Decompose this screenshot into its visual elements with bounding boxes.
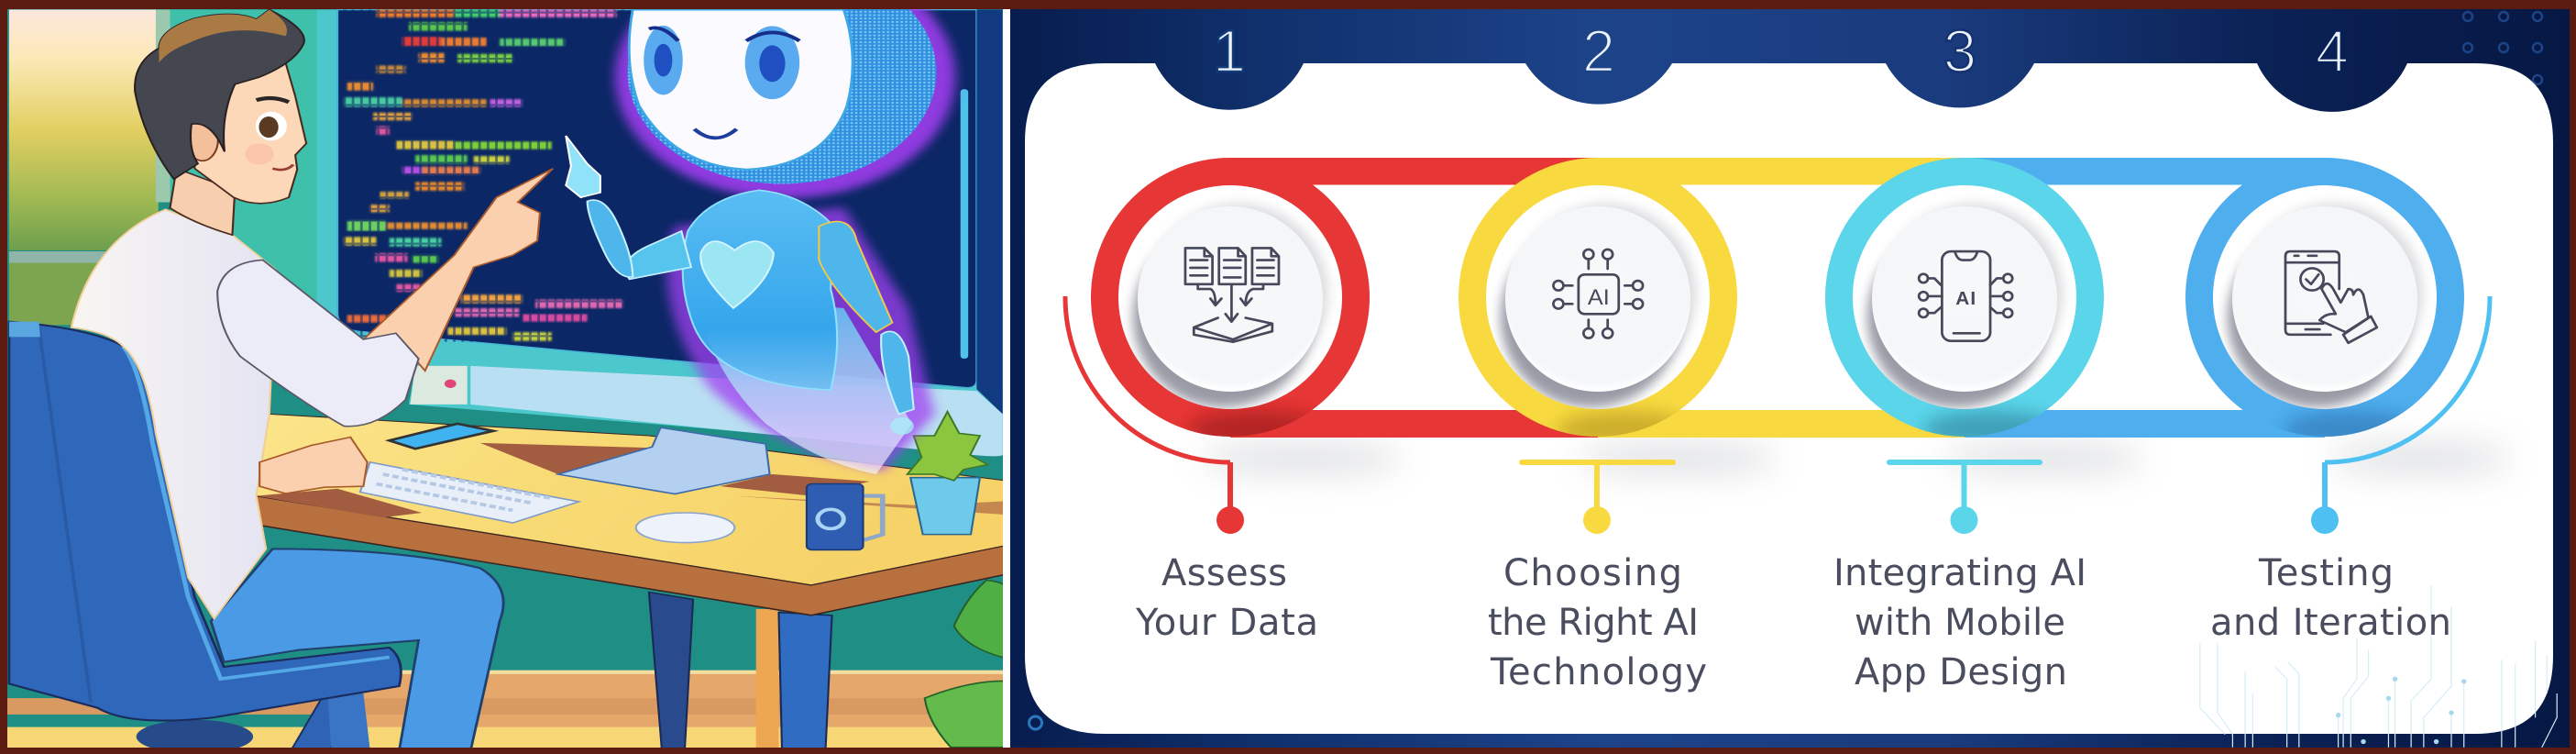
label: Assess Your Data: Your Data (1135, 602, 1318, 644)
decorative dots top right (2463, 12, 2542, 84)
robot tail (710, 307, 911, 474)
step numbers: 1 (1213, 17, 1246, 84)
label: Assess Your Data (1135, 552, 1318, 644)
hood and head (628, 0, 936, 184)
label: Integrating AI with Mobile App Design: App Design (1855, 651, 2067, 693)
circuit decoration (2200, 585, 2557, 748)
icon: AI phone (1919, 251, 2012, 341)
connecting bands (1230, 158, 2325, 438)
hand on desk (259, 438, 368, 493)
leaves (925, 581, 1012, 748)
step numbers: 3 (1943, 17, 1976, 84)
label: Testing and Iteration: Testing (2258, 552, 2394, 594)
right panel: navy background (1010, 9, 2570, 748)
purple glow (615, 0, 955, 198)
code on screen (341, 9, 626, 342)
illustration: developer and AI robot at a desk (0, 0, 1039, 754)
phone on desk (390, 424, 493, 449)
label: Testing and Iteration: and Iteration (2210, 602, 2451, 644)
step 4 ring (2185, 158, 2464, 448)
robot (566, 0, 955, 474)
heart (700, 241, 774, 308)
desk top (257, 414, 1012, 615)
mouse (636, 513, 734, 543)
connector: step 3 (1889, 462, 2040, 534)
label: Integrating AI with Mobile App Design: Integrating AI (1833, 552, 2086, 594)
face (194, 62, 306, 204)
white card with number notches (1025, 63, 2553, 734)
neck (170, 169, 235, 235)
step numbers: 2 (1582, 17, 1615, 84)
step 2 ring (1459, 158, 1737, 448)
connector: step 4 (2311, 296, 2490, 534)
hair (135, 9, 304, 179)
desk legs (649, 593, 832, 751)
robot body (683, 190, 837, 390)
step 1 ring (1091, 158, 1370, 448)
icon: AI chip: AI (1588, 285, 1610, 310)
monitor stand (558, 427, 770, 494)
step numbers (1213, 17, 2349, 84)
label: Choosing the Right AI Technology: Technology (1490, 651, 1707, 693)
keyboard (360, 462, 578, 523)
label: Assess Your Data: Assess (1161, 552, 1287, 594)
white gap between panels (1003, 9, 1010, 748)
label: Integrating AI with Mobile App Design: with Mobile (1855, 602, 2065, 644)
icon: AI chip (1553, 249, 1643, 338)
label: Testing and Iteration (2210, 552, 2451, 644)
person (72, 9, 553, 751)
monitor (316, 9, 1039, 458)
label: Integrating AI with Mobile App Design (1833, 552, 2086, 693)
decorative dot bottom left (1029, 716, 1041, 729)
label: Choosing the Right AI Technology: the Right AI (1488, 602, 1699, 644)
forearm and pointing hand (363, 169, 553, 371)
label: Choosing the Right AI Technology (1488, 552, 1707, 693)
icon: AI phone: AI (1955, 289, 1976, 309)
connector: step 2 (1522, 462, 1673, 534)
potted plant (908, 412, 987, 535)
shirt torso (72, 209, 276, 618)
label: Choosing the Right AI Technology: Choosing (1503, 552, 1682, 594)
chair (9, 322, 401, 753)
step numbers: 4 (2316, 17, 2349, 84)
room background (0, 0, 1039, 754)
sleeve (217, 260, 419, 427)
robot arms (626, 231, 691, 279)
coffee mug (807, 484, 883, 549)
connector: step 1 (1065, 296, 1244, 534)
step 3 ring (1825, 158, 2104, 448)
icon: phone with touch check (2285, 251, 2377, 343)
icon: documents into data box (1185, 248, 1279, 342)
soft shadows under bands (1201, 442, 2512, 475)
jeans (211, 549, 503, 751)
